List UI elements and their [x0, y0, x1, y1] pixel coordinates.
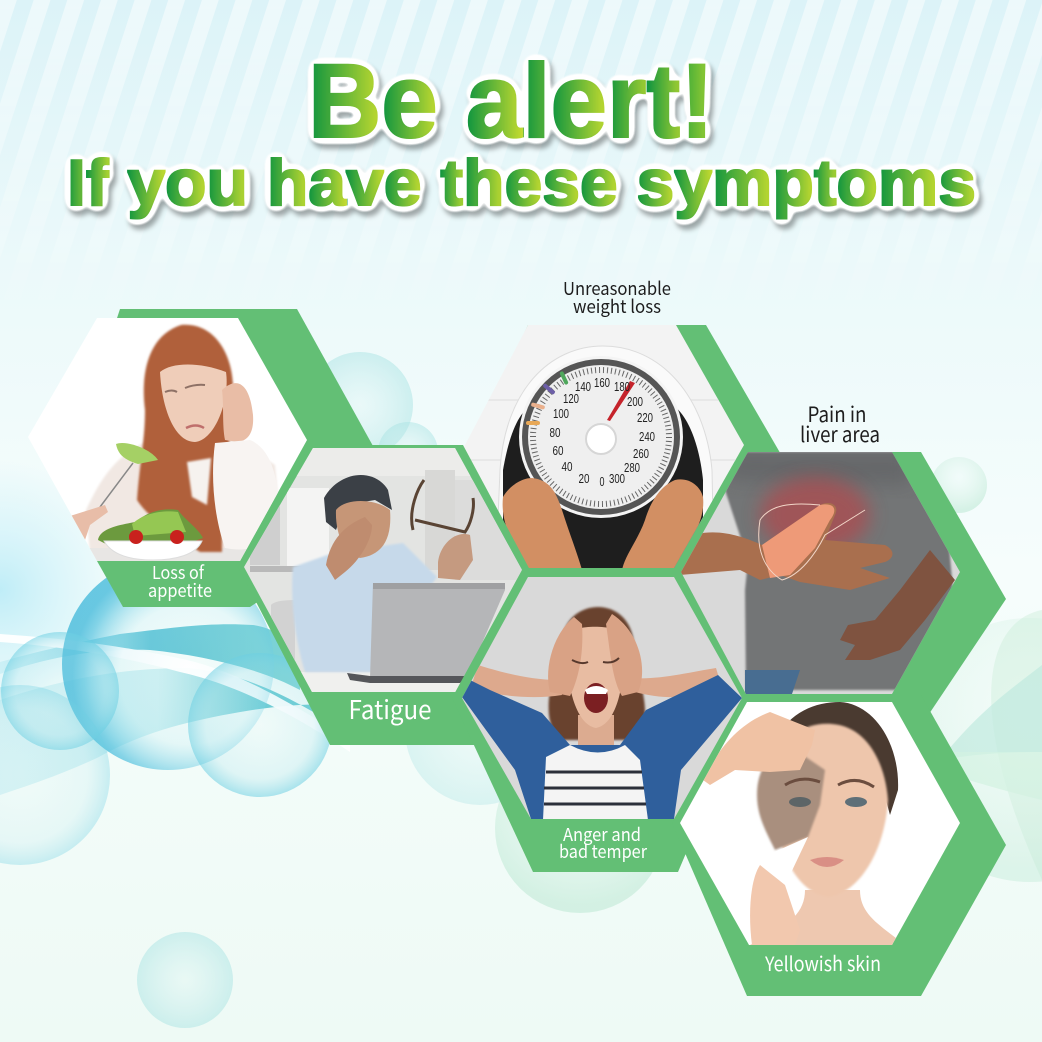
title [67, 43, 976, 219]
photo: woman with salad [28, 318, 307, 561]
photo: bathroom scale with feet: 240 [639, 430, 655, 444]
label: Yellowish skin: Yellowish skin [764, 948, 881, 977]
panel: fatigue [238, 440, 530, 745]
photo: bathroom scale with feet: 160 [594, 376, 610, 390]
photo: bathroom scale with feet: 260 [633, 447, 649, 461]
panel: pain in liver area [675, 399, 1006, 720]
panel: weight loss [460, 275, 790, 572]
green hexagon [452, 570, 752, 872]
label: Loss of appetite: appetite [148, 577, 212, 603]
green hexagon [672, 695, 1006, 996]
panel: anger and bad temper [452, 570, 752, 872]
label: Pain in liver area: Pain in [808, 399, 866, 429]
label: Unreasonable weight loss [563, 275, 671, 319]
label: Loss of appetite [148, 559, 212, 603]
title line: Be alert!: Be alert! [308, 43, 714, 160]
photo: screaming woman [455, 570, 750, 825]
label: Loss of appetite: Loss of [152, 559, 205, 585]
photo: bathroom scale with feet: 20 [578, 472, 590, 486]
panel: yellowish skin [672, 695, 1006, 996]
photo: bathroom scale with feet: 40 [562, 460, 573, 474]
photo: bathroom scale with feet: 80 [550, 426, 561, 440]
photo: bathroom scale with feet: 180 [614, 380, 630, 394]
green hexagon [470, 325, 790, 572]
photo: bathroom scale with feet: 100 [553, 407, 569, 421]
decorative bubbles and waves [0, 352, 1042, 1028]
label: Anger and bad temper: Anger and [563, 821, 641, 847]
label: Pain in liver area [800, 399, 880, 449]
photo: bathroom scale with feet [460, 320, 750, 570]
label: Unreasonable weight loss: weight loss [573, 293, 661, 319]
photo: bathroom scale with feet: 220 [637, 411, 653, 425]
green hexagon [90, 309, 373, 607]
green hexagon [681, 452, 1006, 720]
label: Pain in liver area: liver area [800, 419, 880, 449]
photo: bathroom scale with feet: 120 [563, 392, 579, 406]
label: Anger and bad temper [559, 821, 648, 864]
panel: loss of appetite [20, 309, 373, 607]
photo: bathroom scale with feet: 60 [552, 444, 564, 458]
title line: If you have these symptoms: If you have these symptoms [67, 146, 976, 219]
photo: bathroom scale with feet: 0 [600, 475, 605, 489]
label: Fatigue: Fatigue [348, 690, 432, 727]
photo: tired man at laptop [240, 440, 530, 696]
photo: bathroom scale with feet: 200 [627, 395, 643, 409]
green hexagon [238, 445, 530, 745]
photo: bathroom scale with feet: 280 [624, 461, 640, 475]
label: Anger and bad temper: bad temper [559, 838, 648, 864]
photo: bathroom scale with feet: 140 [575, 380, 591, 394]
photo: bathroom scale with feet: 300 [609, 472, 625, 486]
label: Unreasonable weight loss: Unreasonable [563, 275, 671, 301]
photo: woman peeling skin [675, 695, 965, 950]
photo: hands on abdomen with liver outline [675, 445, 965, 700]
